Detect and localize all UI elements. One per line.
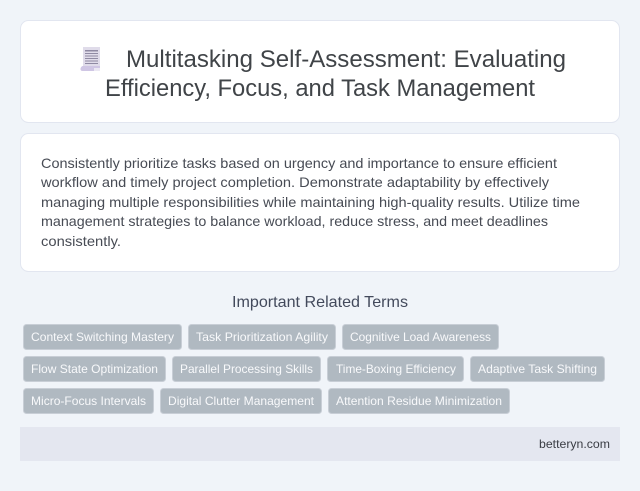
title: Multitasking Self-Assessment: Evaluating (126, 46, 566, 73)
tag: micro-focus intervals (24, 388, 154, 414)
tag: cognitive load awareness (342, 324, 498, 350)
text block: description: workflow and timely project completion. Demonstrate adaptability by effectively (40, 174, 549, 190)
tag: context switching mastery (24, 324, 182, 350)
tag: task prioritization agility (188, 324, 336, 350)
text block: description: managing multiple responsibilities while maintaining high-quality results. Utilize time (41, 194, 580, 210)
tag: parallel processing skills: Parallel Processing Skills (180, 362, 313, 376)
panel: description card (20, 134, 620, 272)
tag: flow state optimization: Flow State Optimization (31, 362, 158, 376)
title (105, 46, 566, 102)
tag: context switching mastery: Context Switching Mastery (31, 330, 174, 344)
tag: attention residue minimization: Attention Residue Minimization (336, 394, 502, 408)
tag: micro-focus intervals: Micro-Focus Intervals (31, 394, 146, 408)
tag: time-boxing efficiency: Time-Boxing Efficiency (336, 362, 456, 376)
tag: time-boxing efficiency (328, 356, 464, 382)
title: Efficiency, Focus, and Task Management (105, 75, 535, 102)
tag: flow state optimization (24, 356, 166, 382)
tag: attention residue minimization (328, 388, 510, 414)
tag: digital clutter management: Digital Clutter Management (168, 394, 315, 408)
icon: document scroll (80, 47, 100, 71)
tag: cognitive load awareness: Cognitive Load Awareness (350, 330, 491, 344)
tag: adaptive task shifting (470, 356, 604, 382)
tag: parallel processing skills (172, 356, 320, 382)
tag: digital clutter management (160, 388, 322, 414)
text block: description (40, 155, 580, 249)
heading: important related terms: Important Related Terms (232, 294, 408, 311)
tag: adaptive task shifting: Adaptive Task Shifting (478, 362, 597, 376)
footer text: site name: betteryn.com (539, 437, 610, 451)
footer bar (20, 427, 620, 461)
text block: description: management strategies to balance workload, reduce stress, and meet deadlines (41, 213, 548, 229)
text block: description: consistently. (41, 233, 121, 249)
panel: title card (20, 20, 620, 122)
tag: task prioritization agility: Task Prioritization Agility (196, 330, 328, 344)
tag group: related terms (24, 324, 604, 414)
text block: description: Consistently prioritize tasks based on urgency and importance to ensure efficient (41, 155, 557, 171)
